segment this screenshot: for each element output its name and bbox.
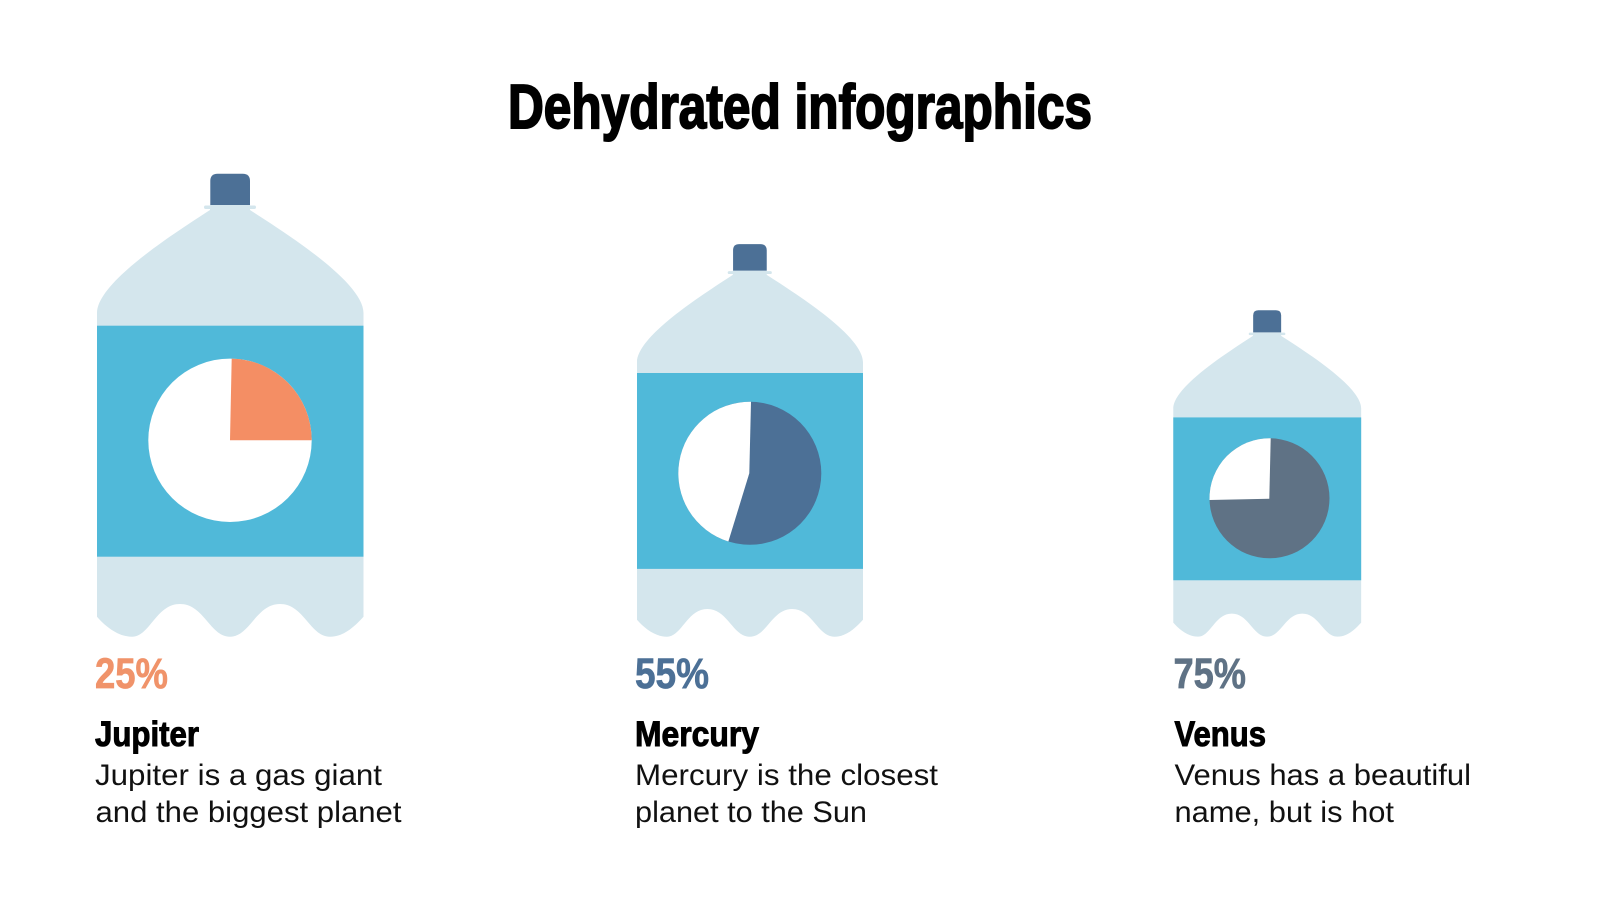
bottle body [1173, 310, 1361, 637]
name: Jupiter: Jupiter [95, 715, 199, 754]
description: Mercury: planet to the Sun [635, 796, 867, 829]
bottle body [637, 244, 863, 637]
description: Venus [1174, 759, 1471, 829]
description: Jupiter: Jupiter is a gas giant [95, 759, 383, 792]
text block: Mercury [635, 650, 939, 829]
panel: Venus bottle [1173, 310, 1361, 637]
description: Venus: Venus has a beautiful [1174, 759, 1471, 792]
text block: Jupiter [95, 650, 402, 829]
percentage: 75%: 75% [1174, 650, 1246, 698]
pie chart: 75% [1209, 438, 1330, 558]
percentage: 55%: 55% [635, 650, 709, 698]
description: Mercury [635, 759, 939, 829]
pie chart: 25% [148, 359, 312, 522]
percentage: 25%: 25% [95, 650, 168, 698]
text block: Venus [1174, 650, 1471, 829]
panel: Jupiter bottle [97, 174, 364, 637]
panel: Mercury bottle [637, 244, 863, 637]
bottle body [97, 174, 364, 637]
description: Jupiter: and the biggest planet [96, 796, 402, 829]
name: Mercury: Mercury [635, 715, 759, 754]
description: Venus: name, but is hot [1174, 796, 1395, 829]
pie chart: 55% [678, 402, 821, 545]
title: Dehydrated infographics [508, 73, 1092, 142]
description: Jupiter [95, 759, 402, 829]
description: Mercury: Mercury is the closest [635, 759, 939, 792]
name: Venus: Venus [1174, 715, 1266, 754]
